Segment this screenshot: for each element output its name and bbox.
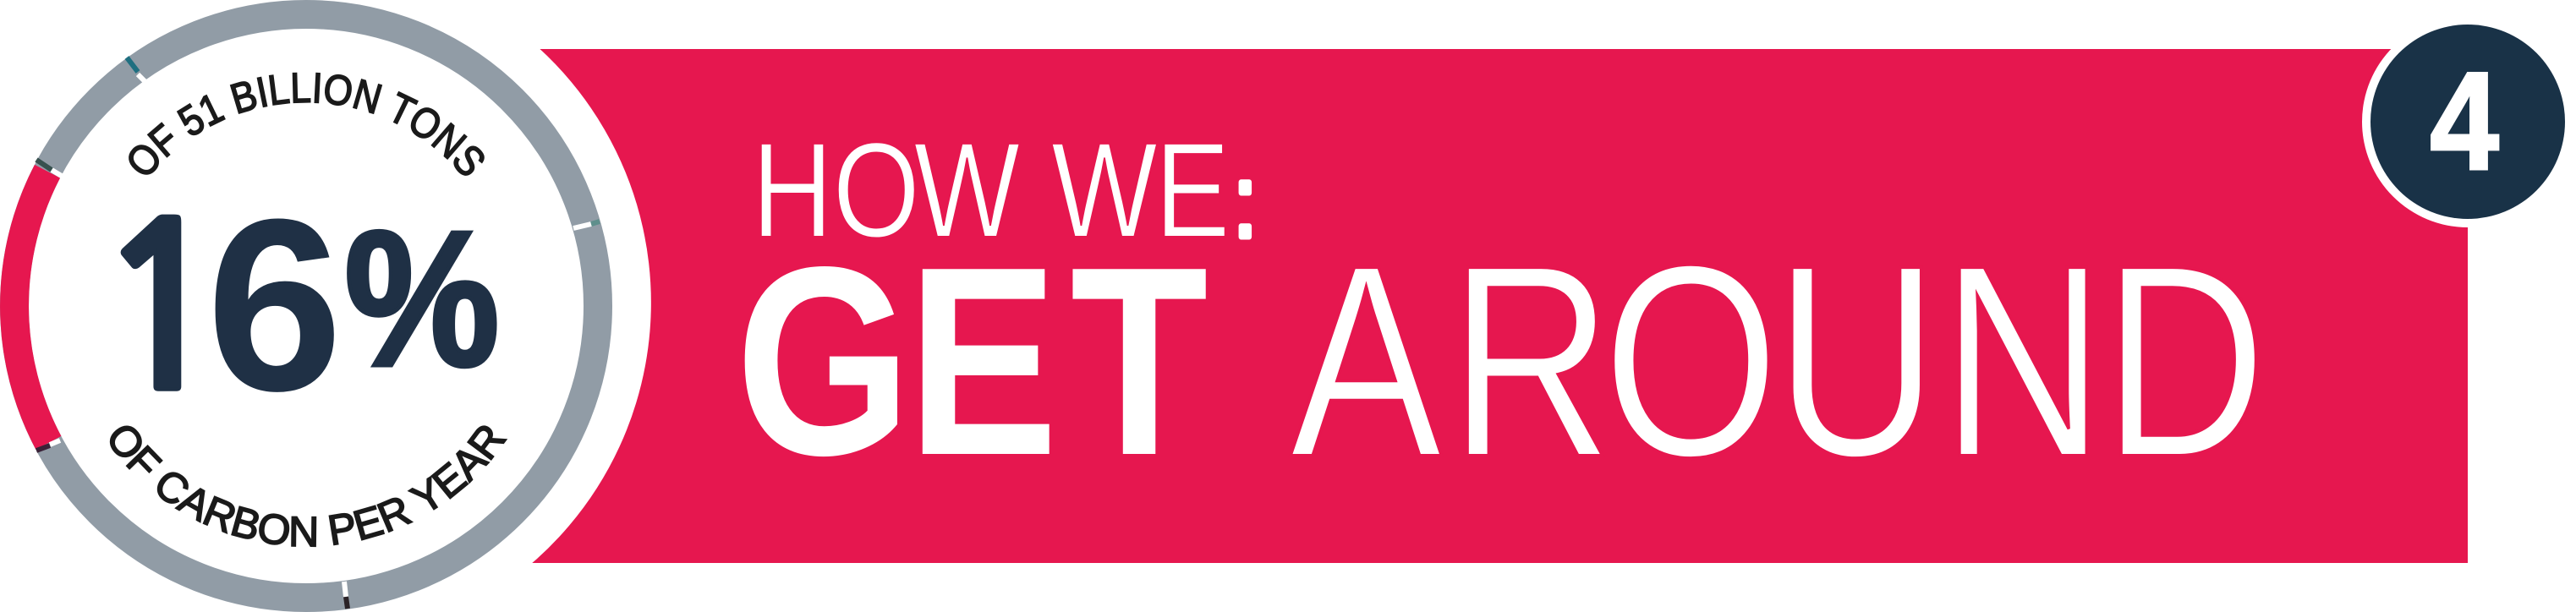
digits: 16: 1 — [93, 198, 232, 423]
badge: number 4: 4 — [2430, 44, 2499, 199]
bold word: get: GET — [736, 211, 1209, 511]
light word: around: AROUND — [1291, 208, 2266, 515]
panel: red banner — [423, 49, 2468, 563]
segment ticks — [36, 57, 600, 609]
stat: 16% — [93, 168, 500, 442]
donut chart: 16% share — [14, 14, 600, 609]
curved label: of carbon per year: OF CARBON PER YEAR — [110, 425, 507, 548]
percent sign: % — [344, 191, 500, 407]
badge: number 4 — [2362, 16, 2573, 227]
red arc: 16% segment — [14, 172, 48, 443]
white disc behind ring — [0, 0, 651, 612]
heading line: how we: HOW WE — [752, 115, 1230, 266]
digits: 16: 6 — [206, 168, 343, 442]
curved label: of 51 billion tons: OF 51 BILLION TONS — [129, 73, 485, 176]
heading line: how we: : — [1233, 144, 1257, 259]
heading line: get around — [736, 208, 2266, 515]
